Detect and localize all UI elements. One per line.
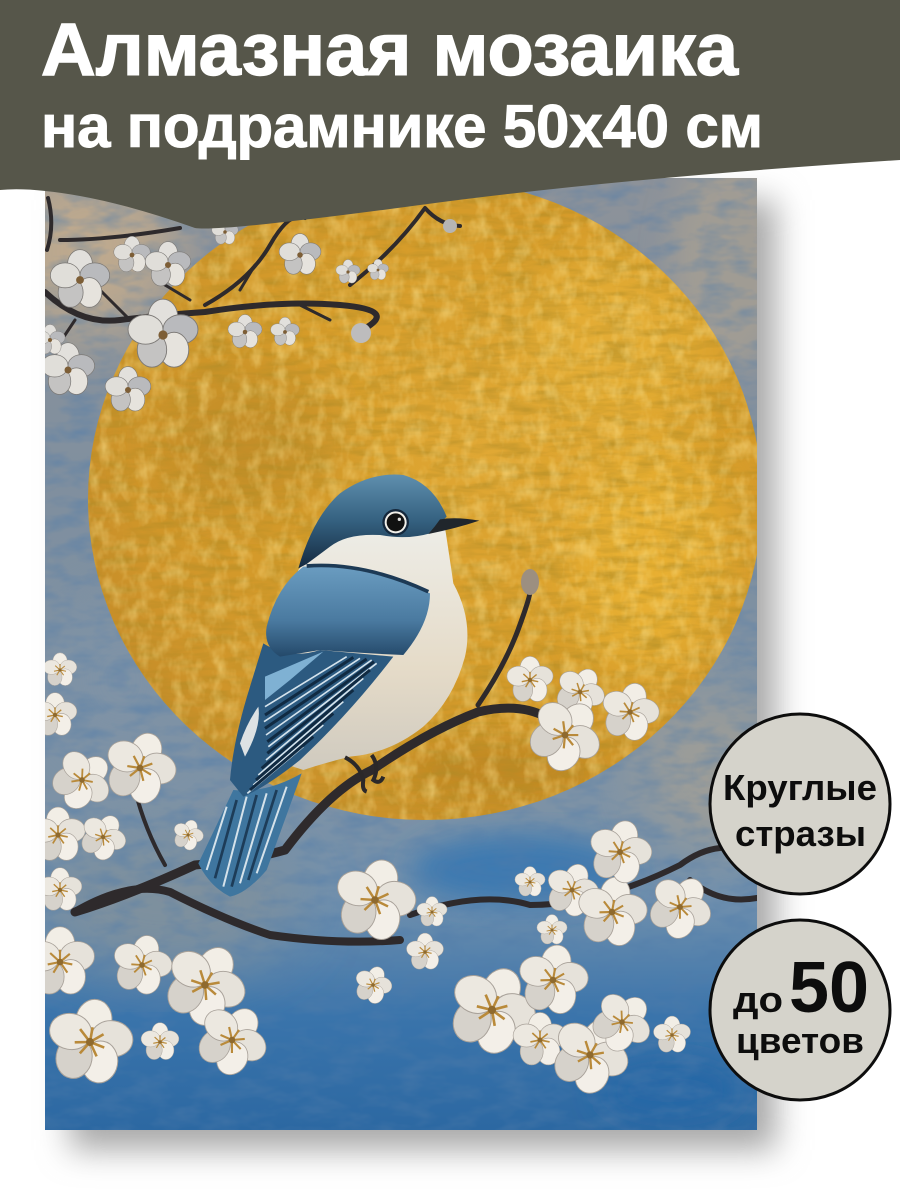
- bird tail: [198, 773, 302, 897]
- flowers: upper left grey blossoms: [35, 218, 457, 411]
- bird collar line: [307, 565, 428, 592]
- bird body: [292, 530, 468, 770]
- flowers: lower blossoms: [26, 653, 724, 1104]
- title line 1: Алмазная мозаика: [41, 8, 739, 91]
- bird feet: [345, 755, 383, 792]
- gold moon: [80, 170, 770, 830]
- header banner: [0, 0, 900, 229]
- badge: round rhinestones: [710, 714, 890, 894]
- badge text line 2: стразы: [735, 813, 866, 854]
- bird mantle: [266, 566, 430, 657]
- badge word: до: до: [733, 979, 783, 1020]
- bird wing feathers: [230, 643, 393, 797]
- badge text line 1: Круглые: [723, 767, 877, 808]
- canvas drop shadow: [70, 200, 776, 1150]
- flowers: right cluster by the bird: [507, 569, 665, 783]
- bird: [198, 475, 479, 897]
- branches: [45, 198, 757, 942]
- badge: up to 50 colors: [710, 920, 890, 1100]
- title line 2: на подрамнике 50х40 см: [41, 93, 763, 160]
- bird eye: [382, 509, 409, 536]
- painting: [45, 178, 757, 1130]
- badge number: 50: 50: [789, 948, 869, 1028]
- bird beak: [428, 518, 479, 534]
- bird head: [298, 475, 447, 568]
- badge word: цветов: цветов: [736, 1020, 864, 1061]
- painting background: [45, 178, 757, 1130]
